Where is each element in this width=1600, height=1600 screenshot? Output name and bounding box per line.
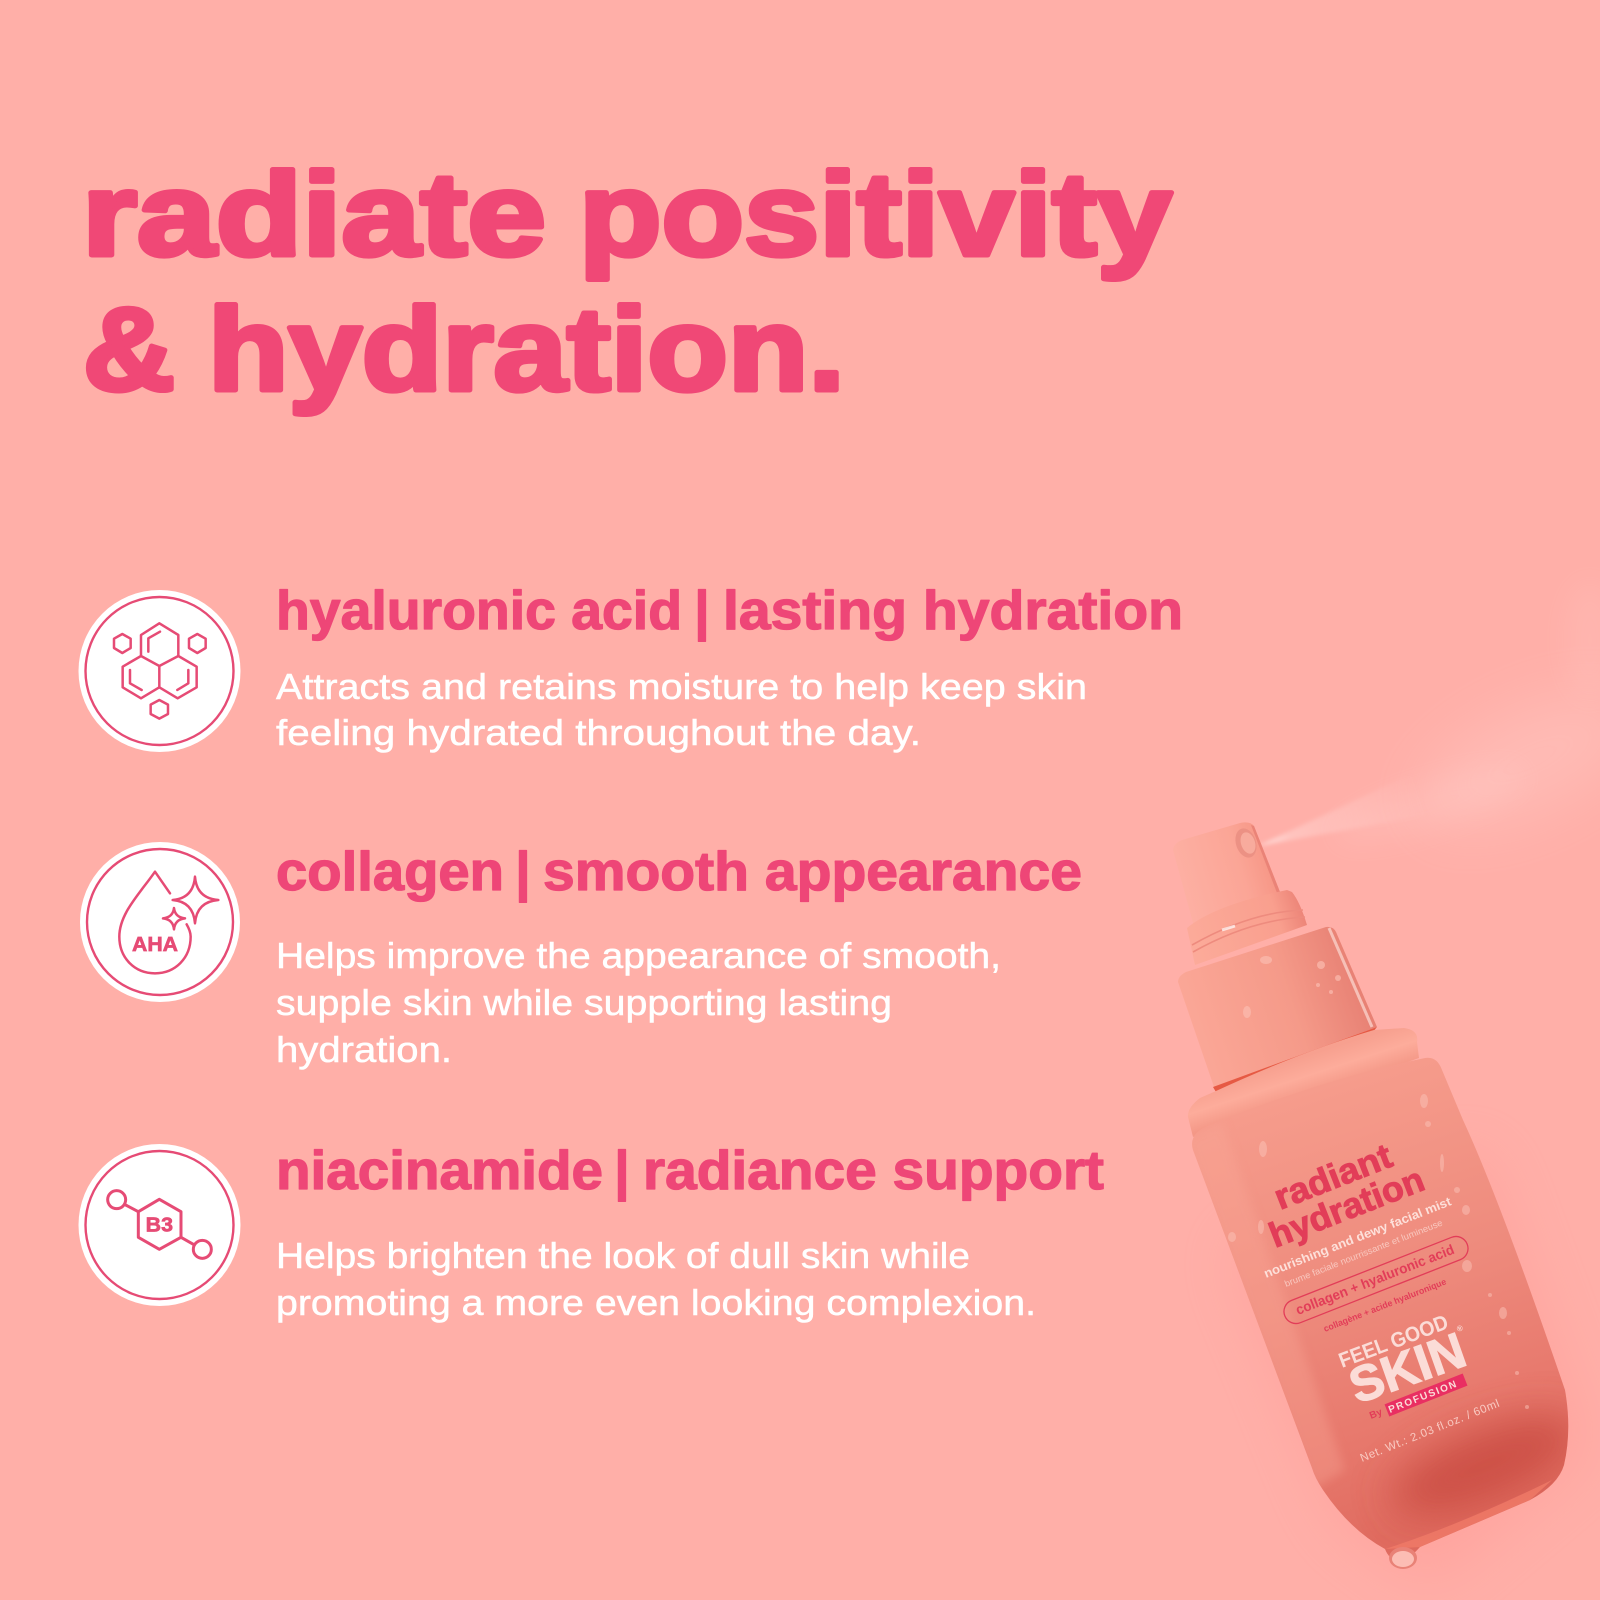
title: positivity — [579, 149, 1172, 281]
heading: niacinamide — [276, 1139, 1104, 1202]
title: & — [83, 284, 175, 416]
water droplets — [1228, 1094, 1529, 1409]
panel: niacinamide — [78, 1139, 1104, 1323]
panel: collagen — [80, 840, 1082, 1070]
heading: collagen: collagen — [276, 840, 504, 902]
label: radiant hydration: radiant — [1269, 1136, 1398, 1217]
bottle cap — [1173, 822, 1280, 930]
heading: hyaluronic acid: hyaluronic acid — [276, 579, 682, 641]
title: radiate — [82, 149, 546, 281]
icon: B3 molecule — [78, 1144, 240, 1306]
icon: molecule — [78, 590, 240, 752]
logo: feel good skin: SKIN — [1342, 1322, 1473, 1414]
text: niacinamide description: promoting a more even looking complexion. — [276, 1282, 1036, 1323]
hanging drop — [1389, 1547, 1417, 1569]
text: niacinamide description — [276, 1235, 1036, 1323]
label: ingredient pill: collagène + acide hyaluronique — [1322, 1277, 1448, 1334]
label: ingredient pill — [1280, 1233, 1472, 1334]
product bottle — [1173, 822, 1591, 1585]
icon: B3 molecule: B3 — [146, 1215, 173, 1237]
shoulder sleeve — [1178, 927, 1377, 1087]
title — [82, 149, 1172, 416]
text: hyaluronic acid description: feeling hydrated throughout the day. — [276, 712, 921, 753]
text: niacinamide description: Helps brighten the look of dull skin while — [276, 1235, 970, 1276]
icon: AHA drop: AHA — [132, 934, 178, 956]
text: hyaluronic acid description — [276, 666, 1087, 753]
logo: feel good skin: ® — [1455, 1323, 1464, 1334]
mist spray — [1258, 580, 1600, 857]
label: ingredient pill: collagen + hyaluronic acid — [1293, 1241, 1456, 1318]
heading: collagen — [276, 840, 1082, 903]
heading: hyaluronic acid — [276, 579, 1183, 642]
label: descriptors: nourishing and dewy facial mist — [1262, 1194, 1454, 1281]
icon: AHA drop — [80, 842, 240, 1002]
text: collagen description: Helps improve the appearance of smooth, — [276, 935, 1001, 976]
logo: feel good skin: FEEL GOOD — [1336, 1311, 1451, 1373]
ribbed collar — [1187, 890, 1307, 965]
text: collagen description: supple skin while supporting lasting — [276, 982, 892, 1023]
logo: feel good skin: PROFUSION — [1387, 1379, 1458, 1416]
panel: hyaluronic acid — [78, 579, 1183, 753]
label: net weight: Net. Wt.: 2.03 fl.oz. / 60ml — [1359, 1398, 1501, 1465]
label: radiant hydration: hydration — [1264, 1160, 1430, 1255]
title: hydration. — [208, 284, 845, 416]
heading: niacinamide: niacinamide — [276, 1139, 603, 1201]
heading: niacinamide: radiance support — [643, 1139, 1104, 1201]
heading: hyaluronic acid: | — [694, 579, 710, 642]
heading: collagen: | — [515, 840, 531, 903]
text: hyaluronic acid description: Attracts and retains moisture to help keep skin — [276, 666, 1087, 707]
logo: feel good skin: By — [1368, 1407, 1384, 1422]
heading: collagen: smooth appearance — [543, 840, 1082, 902]
bottle body — [1185, 1058, 1591, 1569]
heading: niacinamide: | — [614, 1139, 630, 1202]
bottle shadow — [1230, 1150, 1590, 1585]
dark gap under sleeve — [1213, 1027, 1377, 1092]
heading: hyaluronic acid: lasting hydration — [723, 579, 1183, 641]
bottle neck ring — [1188, 1028, 1419, 1137]
label: descriptors: brume faciale nourrissante et lumineuse — [1283, 1218, 1444, 1289]
text: collagen description — [276, 935, 1001, 1070]
bottle label — [1262, 1136, 1501, 1465]
text: collagen description: hydration. — [276, 1029, 452, 1070]
